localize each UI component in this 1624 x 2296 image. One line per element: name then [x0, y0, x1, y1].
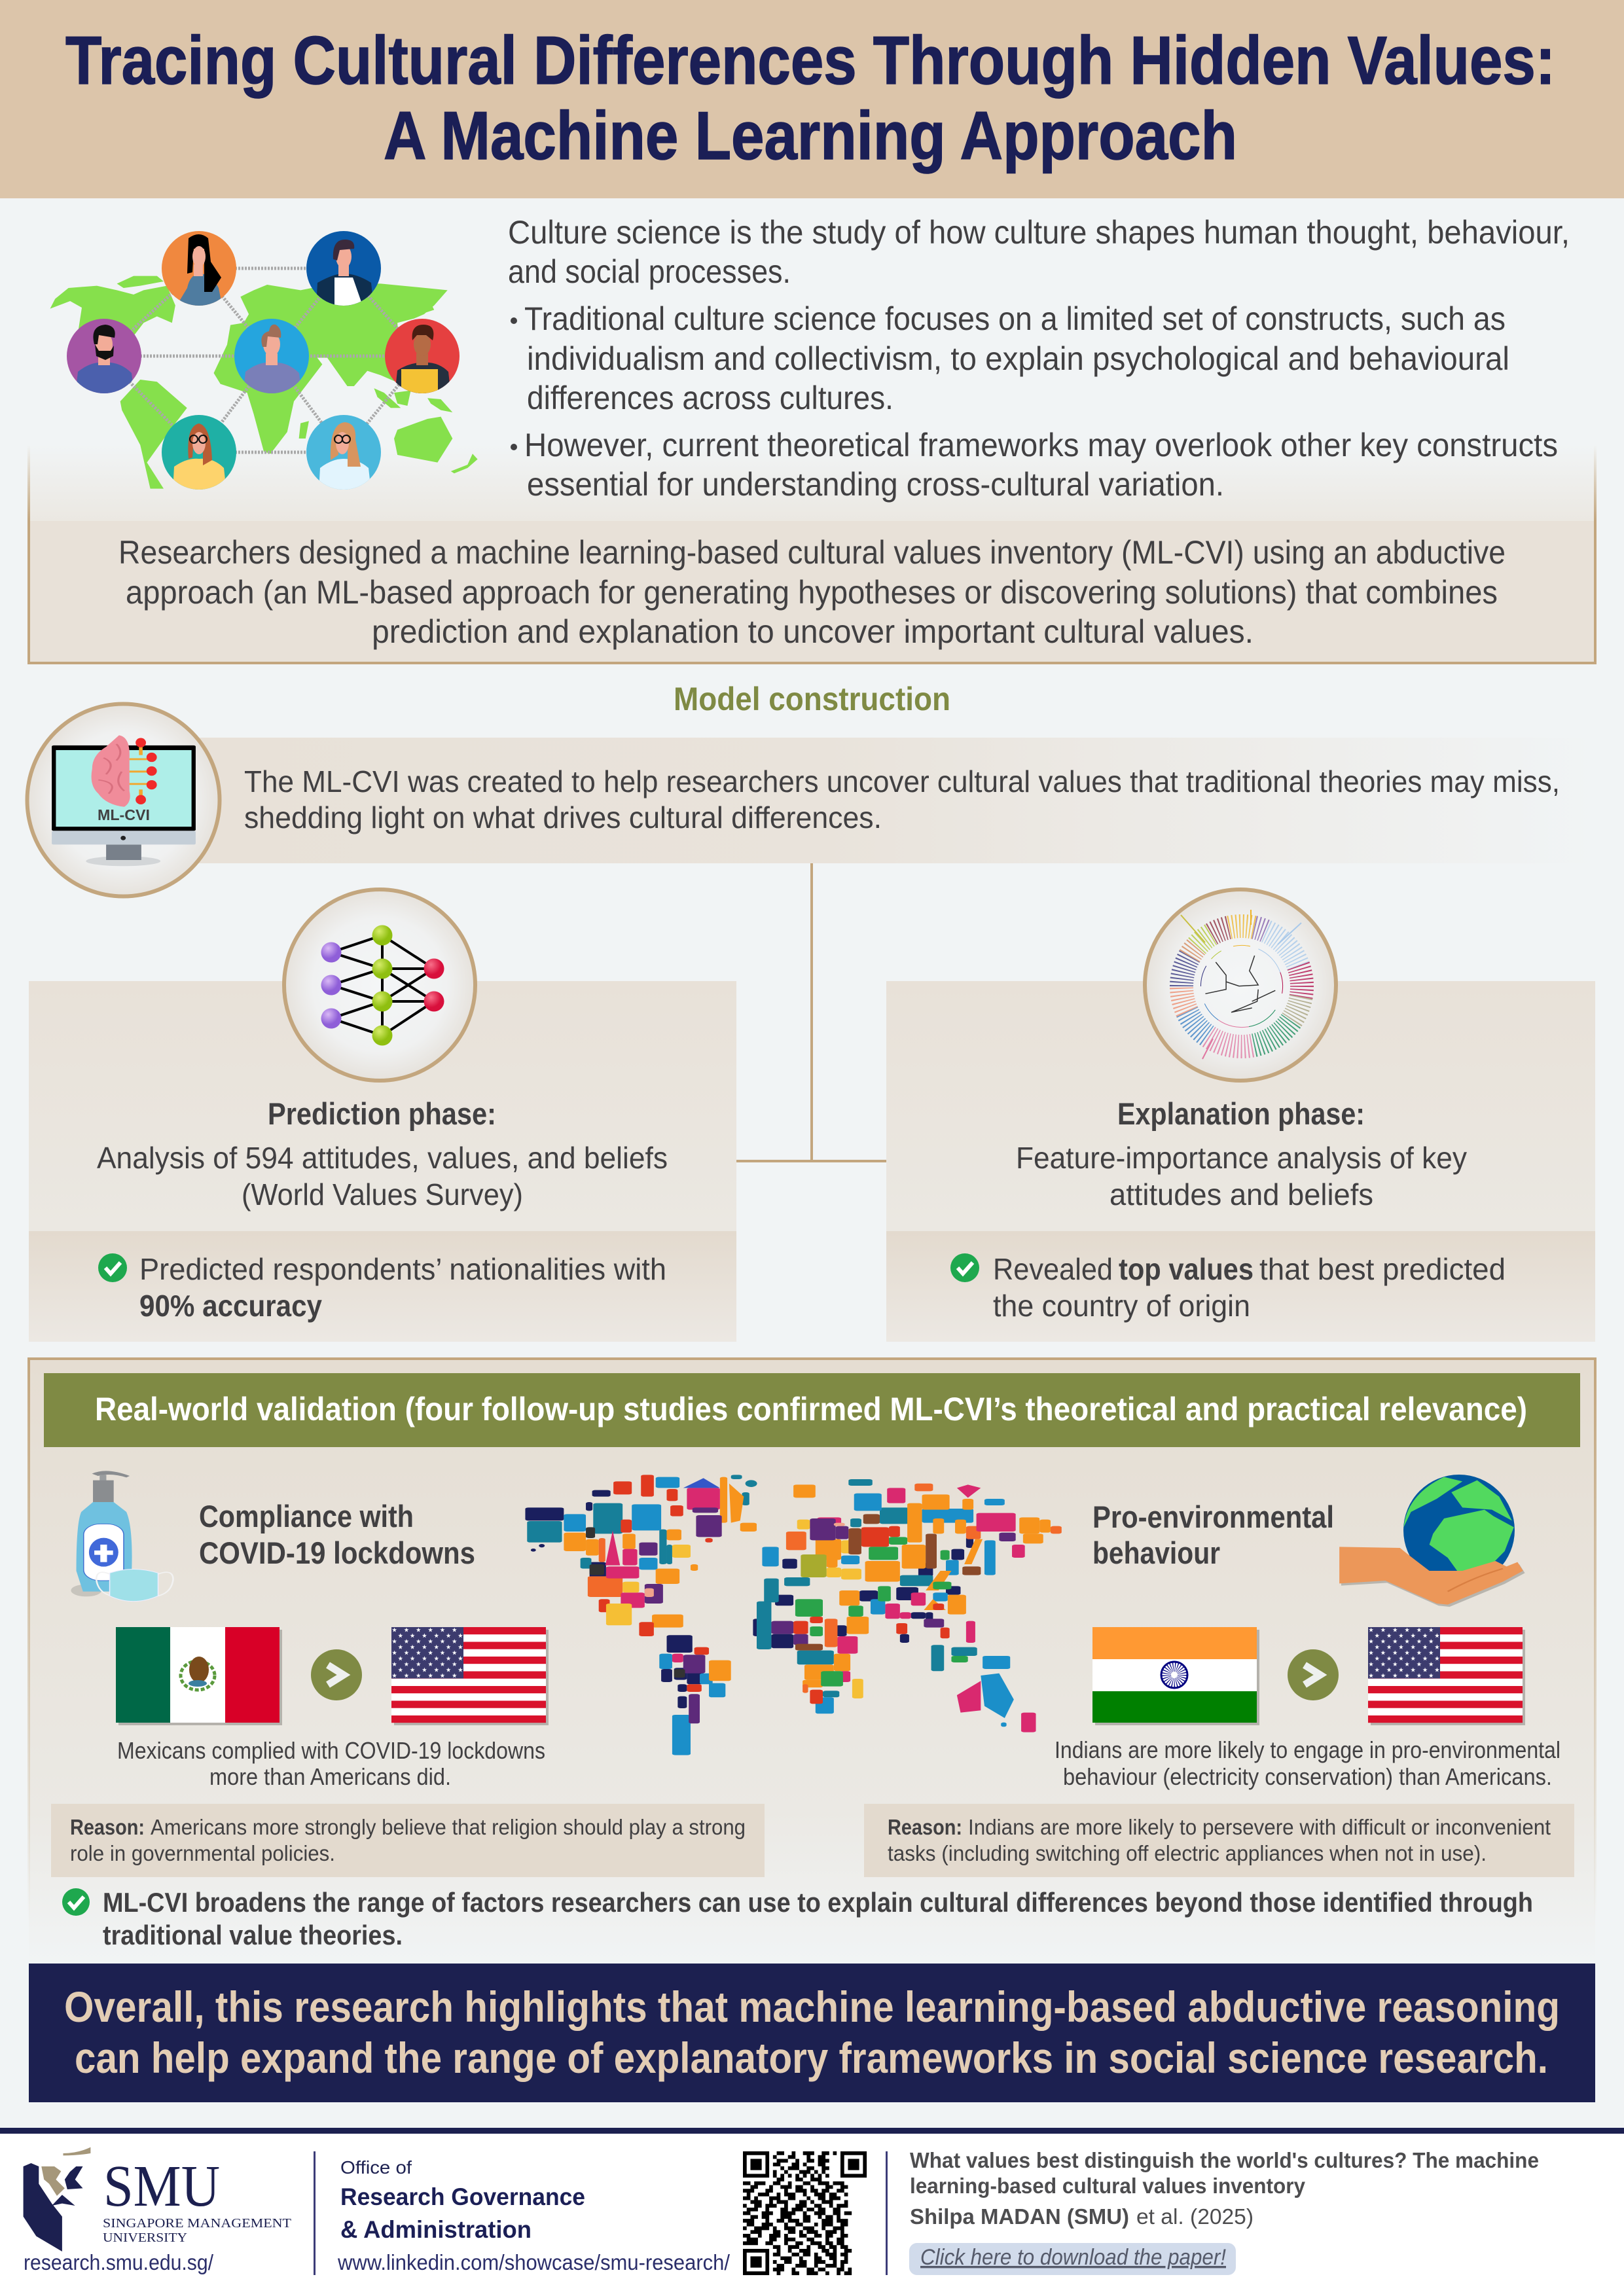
- band text: shedding light on what drives cultural differences.: [244, 800, 882, 834]
- pro-environmental heading: behaviour: [1092, 1535, 1220, 1570]
- intro text block: However, current theoretical frameworks may overlook other key constructs: [524, 427, 1558, 463]
- summary text: approach (an ML-based approach for generating hypotheses or discovering solutions) that combines: [126, 574, 1498, 611]
- summary text: Researchers designed a machine learning-based cultural values inventory (ML-CVI) using an abductive: [118, 534, 1506, 571]
- paper citation: Shilpa MADAN (SMU): [910, 2204, 1129, 2229]
- validation heading bar: Real-world validation (four follow-up studies confirmed ML-CVI’s theoretical and practical relevance): [95, 1391, 1527, 1427]
- prediction heading: Prediction phase:: [268, 1096, 496, 1131]
- intro text block: individualism and collectivism, to explain psychological and behavioural: [527, 340, 1509, 377]
- avatar: woman with long blonde hair: [306, 415, 381, 492]
- avatar: navy man: [306, 231, 381, 308]
- environmental caption: Indians are more likely to engage in pro-environmental: [1055, 1736, 1561, 1763]
- compliance caption: [117, 1737, 545, 1790]
- paper citation: learning-based cultural values inventory: [910, 2174, 1306, 2198]
- connector lines: [736, 863, 886, 1162]
- avatar: bearded man: [67, 319, 141, 395]
- compliance heading: Compliance with: [199, 1499, 414, 1534]
- dotted connection lines: [104, 268, 422, 452]
- SMU logo: SINGAPORE MANAGEMENT: [103, 2216, 291, 2231]
- header band with title: [0, 0, 1624, 198]
- explanation result: the country of origin: [993, 1289, 1250, 1323]
- title line 2: A Machine Learning Approach: [384, 98, 1237, 174]
- conclusion of validation: traditional value theories.: [103, 1920, 403, 1950]
- prediction description: Analysis of 594 attitudes, values, and beliefs: [97, 1141, 668, 1175]
- icon: check: [950, 1253, 979, 1282]
- reason box: Indians: tasks (including switching off electric appliances when not in use).: [888, 1841, 1487, 1865]
- colourful cultural world map: [525, 1475, 1062, 1755]
- footer: [0, 2128, 1624, 2296]
- intro text block: Traditional culture science focuses on a limited set of constructs, such as: [524, 300, 1506, 337]
- overall conclusion box: [29, 1964, 1595, 2102]
- flag: USA: [391, 1627, 549, 1725]
- avatar: man with yellow top: [385, 319, 460, 395]
- compliance heading: [199, 1499, 475, 1570]
- world map with connected people: [50, 231, 478, 492]
- icon: sanitizer bottle and mask: [71, 1471, 173, 1602]
- icon: ML-CVI monitor: ML-CVI: [98, 806, 150, 823]
- explanation description: Feature-importance analysis of key: [1016, 1141, 1467, 1175]
- intro text block: [508, 214, 1570, 503]
- avatar: woman with glasses and yellow top: [162, 415, 236, 492]
- panel: researchers design summary: [27, 445, 1597, 664]
- green world map: [50, 276, 478, 489]
- SMU research website: research.smu.edu.sg/: [24, 2250, 214, 2274]
- explanation result: [993, 1252, 1506, 1323]
- pro-environmental heading: Pro-environmental: [1092, 1499, 1334, 1534]
- band text: [244, 764, 1560, 834]
- prediction result: Predicted respondents’ nationalities with: [139, 1252, 666, 1286]
- office name: Office of: [340, 2157, 412, 2178]
- environmental caption: behaviour (electricity conservation) than Americans.: [1063, 1763, 1552, 1790]
- prediction result: [139, 1252, 666, 1323]
- prediction description: [97, 1141, 668, 1211]
- intro text block: differences across cultures.: [527, 380, 893, 416]
- reason box: Americans: [51, 1804, 765, 1877]
- prediction description: (World Values Survey): [242, 1177, 523, 1211]
- explanation result: top values: [1119, 1252, 1254, 1286]
- download button: Click here to download the paper!: [920, 2245, 1227, 2270]
- paper citation: What values best distinguish the world's cultures? The machine: [910, 2148, 1539, 2172]
- reason box: Indians: Indians are more likely to persevere with difficult or inconvenient: [968, 1815, 1551, 1839]
- flag: India: [1092, 1627, 1259, 1725]
- SMU logo: SMU: [103, 2154, 220, 2219]
- reason box: Americans: Reason:: [70, 1815, 145, 1839]
- comparison arrow: [311, 1649, 362, 1700]
- explanation result: Revealed: [993, 1252, 1113, 1286]
- icon: circular dendrogram: [1145, 889, 1336, 1081]
- validation heading bar: [44, 1373, 1580, 1447]
- compliance caption: more than Americans did.: [209, 1763, 451, 1790]
- intro text block: essential for understanding cross-cultural variation.: [527, 466, 1224, 503]
- pro-environmental heading: [1092, 1499, 1334, 1570]
- reason box: Americans: Americans more strongly believe that religion should play a strong: [151, 1815, 746, 1839]
- compliance caption: Mexicans complied with COVID-19 lockdowns: [117, 1737, 545, 1764]
- office name: Research Governance: [340, 2183, 585, 2210]
- intro text block: and social processes.: [508, 253, 791, 290]
- panel: real-world validation: [27, 1357, 1597, 1964]
- reason box: Indians: [864, 1804, 1574, 1877]
- QR code: [743, 2151, 867, 2275]
- flag: Mexico: [116, 1627, 282, 1725]
- SMU logo: [24, 2147, 291, 2251]
- heading: model construction: Model construction: [674, 681, 950, 717]
- icon: ML-CVI monitor: [27, 704, 220, 897]
- explanation heading: Explanation phase:: [1117, 1096, 1365, 1131]
- SMU logo: UNIVERSITY: [103, 2231, 187, 2245]
- avatar: central man: [234, 319, 309, 395]
- explanation result: that best predicted: [1259, 1252, 1506, 1286]
- paper citation: et al. (2025): [1136, 2204, 1254, 2229]
- ML-CVI description band: [196, 738, 1595, 863]
- summary text: [118, 534, 1506, 650]
- icon: hand holding globe: [1339, 1475, 1525, 1607]
- office name: [340, 2157, 585, 2243]
- compliance heading: COVID-19 lockdowns: [199, 1535, 475, 1570]
- band text: The ML-CVI was created to help researchers uncover cultural values that traditional theories may miss,: [244, 764, 1560, 798]
- office name: & Administration: [340, 2216, 532, 2243]
- conclusion of validation: [62, 1887, 1533, 1950]
- flag: USA: [1368, 1627, 1525, 1725]
- comparison arrow: [1288, 1649, 1339, 1700]
- LinkedIn address: www.linkedin.com/showcase/smu-research/: [337, 2250, 731, 2274]
- environmental caption: [1055, 1736, 1561, 1790]
- avatar: orange woman: [162, 231, 236, 308]
- explanation description: [1016, 1141, 1467, 1211]
- paper citation: [910, 2148, 1539, 2229]
- summary text: prediction and explanation to uncover important cultural values.: [372, 613, 1254, 650]
- reason box: Indians: Reason:: [888, 1815, 962, 1839]
- explanation description: attitudes and beliefs: [1110, 1177, 1373, 1211]
- prediction result: 90% accuracy: [139, 1289, 322, 1323]
- icon: check: [98, 1253, 127, 1282]
- icon: neural network: [284, 889, 475, 1081]
- panel: explanation phase: [886, 889, 1595, 1342]
- intro text block: Culture science is the study of how culture shapes human thought, behaviour,: [508, 214, 1570, 251]
- reason box: Americans: role in governmental policies.: [70, 1841, 335, 1865]
- panel: prediction phase: [29, 889, 736, 1342]
